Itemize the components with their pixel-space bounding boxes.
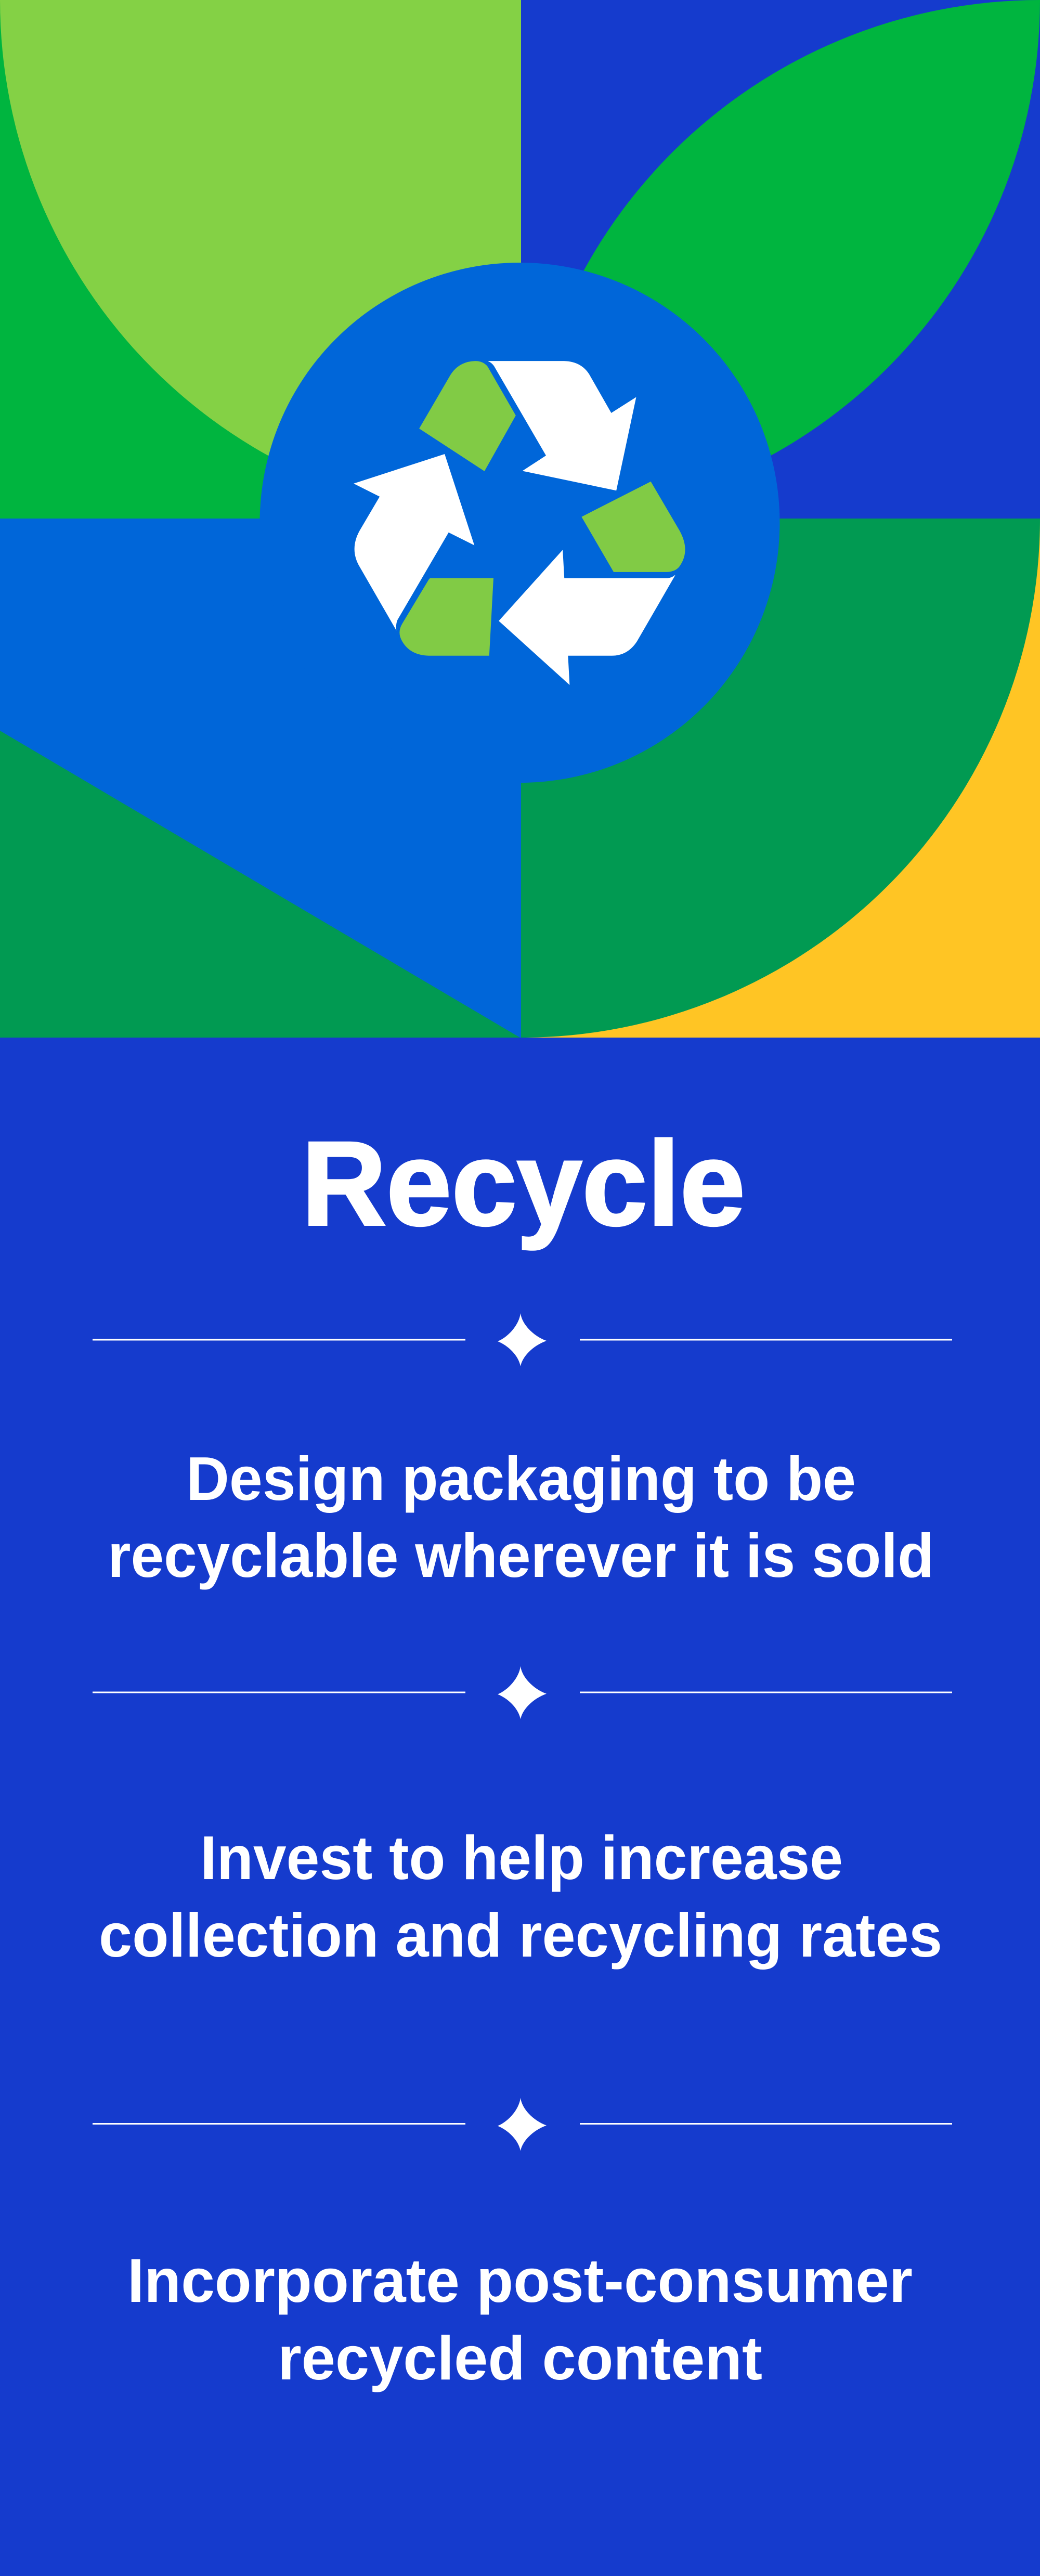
quadrant: top-right blue with green leaf (520, 0, 1040, 520)
divider 3 with star (93, 2098, 952, 2151)
text block: post-consumer (127, 2246, 913, 2393)
title: Recycle (302, 1117, 745, 1250)
text block: post-consumer: recycled content (278, 2324, 762, 2393)
text block: design packaging: recyclable wherever it is sold (108, 1521, 934, 1590)
arrow: left (354, 454, 474, 630)
text block: design packaging (108, 1444, 934, 1590)
segment: top green (419, 361, 516, 471)
arrow: top right (488, 361, 636, 490)
arrow: bottom right (499, 550, 675, 685)
icon: recycling symbol (354, 361, 685, 685)
quadrant: bottom-left dark green with blue wedge (0, 519, 521, 1038)
segment: right green (581, 482, 685, 572)
divider 2 with star (93, 1666, 952, 1719)
text block: post-consumer: Incorporate post-consumer (127, 2246, 913, 2315)
text block: invest (99, 1823, 942, 1970)
panel: geometric hero illustration (0, 0, 1040, 1038)
divider 1 with star (93, 1313, 952, 1366)
text block: design packaging: Design packaging to be (186, 1444, 856, 1513)
text block: invest: collection and recycling rates (99, 1901, 942, 1970)
quadrant: top-left green with light-green quarter circle (0, 0, 521, 521)
central blue circle (260, 263, 780, 783)
segment: bottom green (399, 578, 493, 656)
quadrant: bottom-right yellow with dark-green quarter circle (521, 519, 1040, 1038)
text block: invest: Invest to help increase (200, 1823, 843, 1893)
panel: text background (0, 1038, 1040, 2576)
